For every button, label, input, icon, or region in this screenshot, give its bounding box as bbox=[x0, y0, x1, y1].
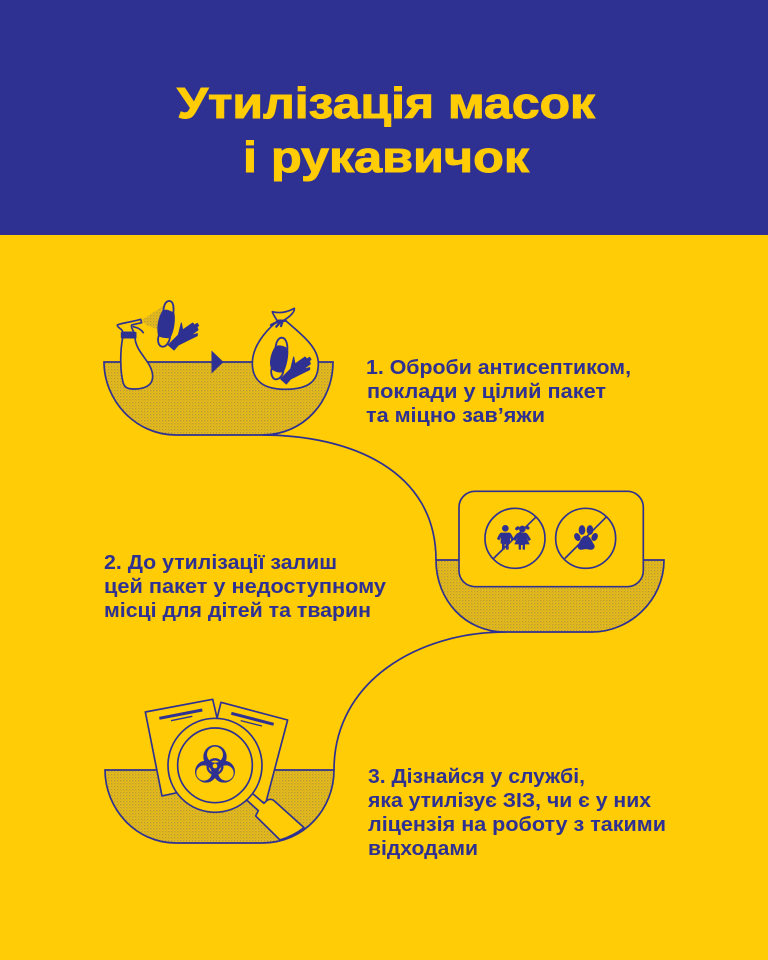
icon: spray mist bbox=[142, 306, 163, 329]
icon: no pets bbox=[556, 508, 616, 568]
title: і рукавичок bbox=[243, 133, 530, 182]
text: step 2: 2. До утилізації залиш bbox=[104, 552, 337, 574]
illustration: bottle, mask and glove bbox=[117, 301, 199, 389]
icon: biohazard bbox=[195, 745, 235, 783]
icon: glove bbox=[168, 323, 199, 350]
text: step 3: яка утилізує ЗІЗ, чи є у них bbox=[367, 790, 651, 812]
connector curve: step 2 to step 3 bbox=[334, 632, 505, 770]
text: step 3: відходами bbox=[368, 838, 478, 860]
text: step 1 bbox=[366, 357, 631, 427]
title: Утилізація масок bbox=[177, 79, 596, 128]
illustration: tied bag bbox=[252, 308, 318, 389]
icon: spray bottle bbox=[117, 319, 153, 389]
header band bbox=[0, 0, 768, 235]
text: step 1: поклади у цілий пакет bbox=[367, 381, 606, 403]
text: step 2: цей пакет у недоступному bbox=[104, 576, 387, 598]
bowl: step 1 bbox=[104, 362, 333, 435]
text: step 1: 1. Оброби антисептиком, bbox=[366, 357, 631, 379]
text: step 3 bbox=[367, 766, 666, 860]
text: step 3: 3. Дізнайся у службі, bbox=[368, 766, 585, 788]
text: step 2 bbox=[104, 552, 387, 622]
icon: mask bbox=[158, 301, 174, 347]
text: step 2: місці для дітей та тварин bbox=[104, 600, 371, 622]
title bbox=[177, 79, 596, 182]
icon: no children bbox=[485, 508, 545, 568]
magnifier lens bbox=[168, 718, 262, 812]
illustration: step 3 documents and magnifier bbox=[145, 699, 304, 840]
arrow bbox=[212, 350, 224, 374]
document: right bbox=[217, 702, 288, 803]
bowl: step 2 bbox=[436, 560, 664, 632]
bowl: step 3 bbox=[105, 770, 334, 843]
icon: mask in bag bbox=[270, 338, 288, 379]
text: step 1: та міцно зав’яжи bbox=[366, 405, 545, 427]
icon: glove in bag bbox=[281, 357, 311, 384]
text: step 3: ліцензія на роботу з такими bbox=[368, 814, 666, 836]
magnifier handle bbox=[247, 793, 304, 840]
document: left bbox=[145, 699, 218, 796]
panel: no access for children and animals bbox=[459, 491, 643, 587]
connector curve: step 1 to step 2 bbox=[262, 435, 436, 560]
icon: bag body bbox=[252, 308, 318, 389]
